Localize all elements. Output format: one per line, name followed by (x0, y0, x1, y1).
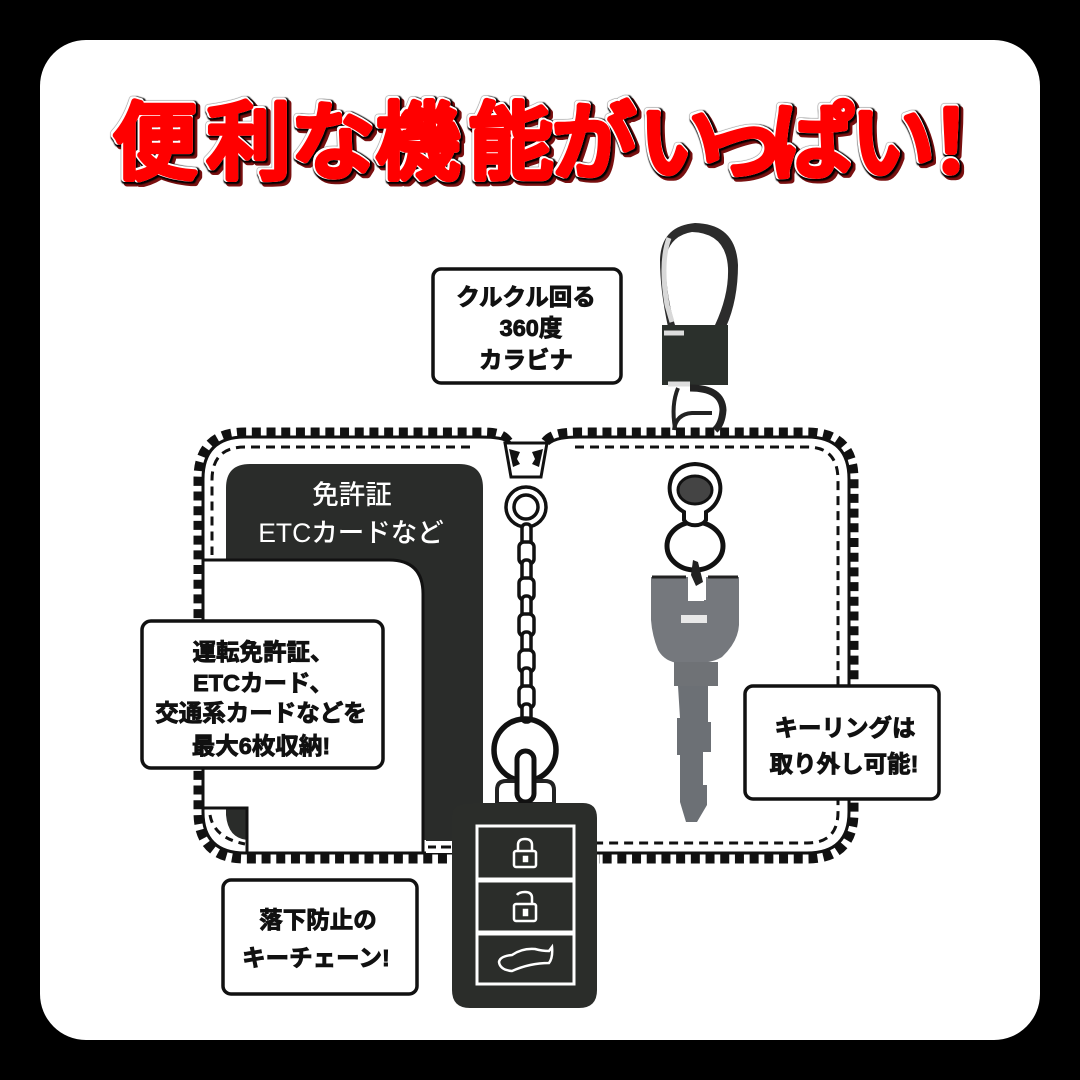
black card slot with label (226, 464, 483, 853)
fob body (452, 803, 597, 1008)
key chain (494, 487, 556, 781)
fob loop tab (517, 751, 534, 802)
top chain ring (506, 487, 546, 527)
lower chain ring (494, 719, 556, 781)
lower hook (674, 388, 723, 430)
button panel frame (477, 826, 574, 984)
right panel zipper teeth (546, 433, 853, 858)
callout: card storage: ETCカード、 (193, 670, 333, 696)
callout: card storage: 最大6枚収納! (192, 733, 330, 759)
car key fob (452, 751, 597, 1008)
black card slot with label: ETCカードなど (258, 518, 444, 548)
key bow slot (688, 585, 704, 601)
callout: carabiner: クルクル回る (456, 284, 596, 310)
carabiner (660, 223, 738, 430)
right panel edge (548, 437, 849, 853)
key ring (667, 522, 723, 570)
callout: anti-drop chain: 落下防止の (259, 907, 377, 933)
key bow top edge (652, 576, 738, 578)
stitching, bottom left corner (210, 815, 245, 844)
swivel block (662, 325, 728, 385)
left panel zipper teeth (199, 433, 600, 858)
house key (651, 464, 739, 822)
carabiner gate highlight (664, 238, 672, 322)
key fob top ring (670, 464, 720, 525)
small stitched strip beside card (426, 841, 453, 853)
callout: anti-drop chain (223, 880, 417, 994)
callout: removable key ring: キーリングは (774, 714, 916, 741)
carabiner loop (660, 223, 738, 327)
pouch white interior (203, 437, 849, 853)
callout: carabiner: 360度 (500, 315, 562, 341)
card slot label: 免許証 (312, 480, 392, 510)
icon: car trunk (499, 947, 552, 971)
fob loop (497, 781, 554, 804)
icon: lock closed (514, 839, 536, 867)
key bow (651, 577, 739, 663)
title: 便利な機能がいっぱい！ (113, 96, 993, 190)
stitching, right (575, 447, 838, 843)
callout: card storage: 交通系カードなどを (155, 700, 367, 726)
left panel edge (203, 437, 512, 853)
button dividers (477, 880, 574, 933)
swivel highlights (664, 333, 690, 384)
pouch: open zip case (199, 433, 853, 858)
key link tab (691, 560, 703, 586)
icon: lock open (514, 892, 536, 921)
callout: card storage: 運転免許証、 (192, 639, 334, 665)
callout: anti-drop chain: キーチェーン! (242, 945, 390, 971)
key bow highlight (681, 615, 707, 623)
callout: removable key ring (745, 686, 939, 799)
zip slider (505, 443, 547, 477)
callout: removable key ring: 取り外し可能! (770, 751, 918, 777)
key fob eyelet (678, 476, 712, 504)
callout: card storage (142, 621, 383, 768)
key blade (677, 686, 711, 822)
key shoulder (674, 662, 718, 686)
callout: carabiner: カラビナ (479, 347, 573, 373)
white card with notch (203, 560, 423, 853)
callout: carabiner (433, 269, 621, 383)
chain links (519, 524, 534, 722)
stitching, left (212, 447, 470, 555)
